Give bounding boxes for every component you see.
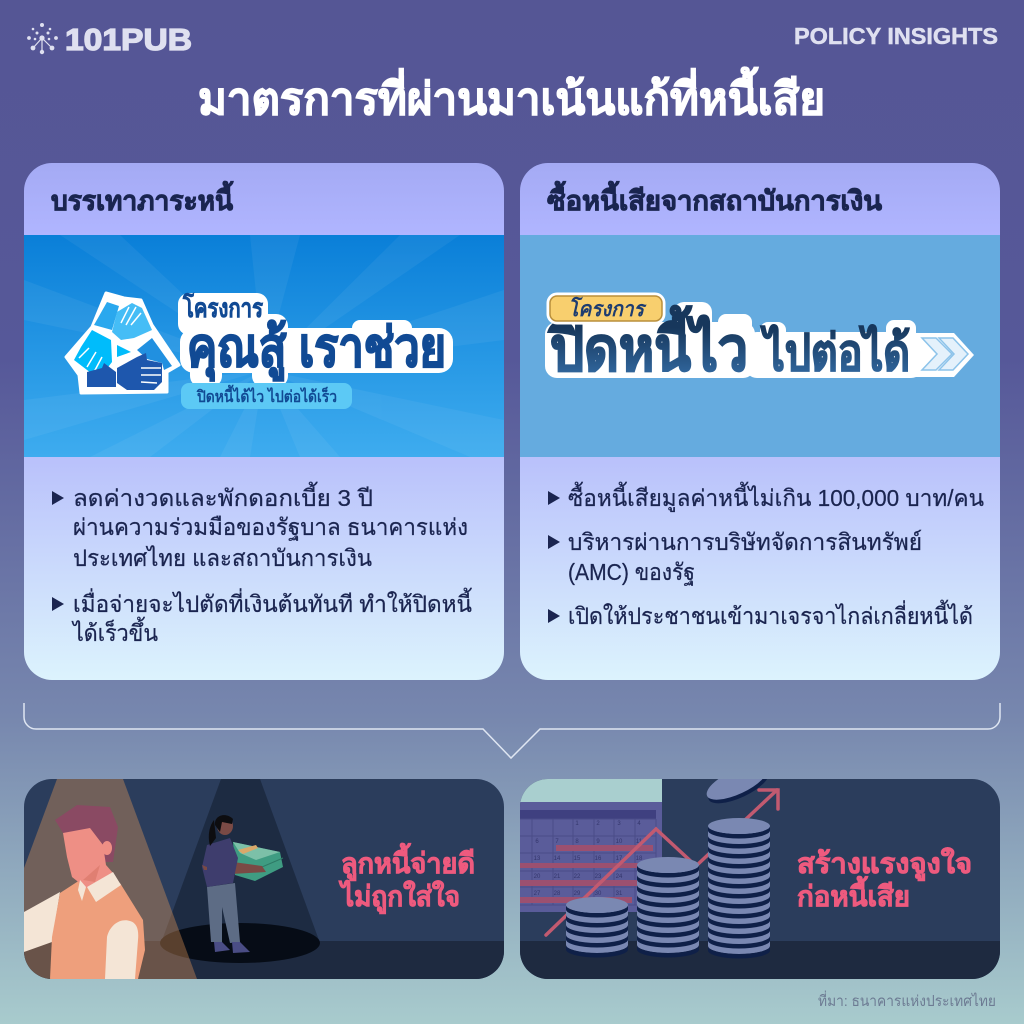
panel: buying bad debt bbox=[520, 163, 1000, 680]
icon: chevrons bbox=[922, 338, 968, 370]
logo halo bbox=[545, 302, 974, 378]
bracket connector bbox=[24, 703, 1000, 758]
icon: calendar: 30 bbox=[595, 891, 602, 897]
bullet list: ประเทศไทย และสถาบันการเงิน bbox=[73, 545, 372, 571]
icon: three hands bbox=[66, 293, 179, 393]
heading: บรรเทาภาระหนี้ bbox=[51, 180, 234, 216]
logo halo bbox=[178, 293, 453, 387]
icon: calendar: 28 bbox=[554, 891, 561, 897]
arrow: rising line bbox=[546, 790, 778, 935]
banner: pid nee wai: ไปต่อได้ bbox=[760, 324, 910, 381]
icon: calendar: 2 bbox=[596, 821, 600, 827]
panel header bbox=[520, 163, 1000, 235]
bullet list: ลดค่างวดและพักดอกเบี้ย 3 ปี bbox=[73, 482, 373, 511]
bullet list: ได้เร็วขึ้น bbox=[71, 617, 158, 646]
caption bbox=[338, 842, 475, 914]
bullet list: (AMC) ของรัฐ bbox=[568, 559, 695, 586]
icon: calendar: 3 bbox=[617, 821, 621, 827]
logo text: name: คุณสู้ เราช่วย bbox=[187, 318, 446, 382]
icon: calendar: 24 bbox=[616, 874, 623, 880]
banner: khun su rao chuai bbox=[24, 235, 504, 457]
bullet list: ซื้อหนี้เสียมูลค่าหนี้ไม่เกิน 100,000 บาท/คน bbox=[568, 482, 984, 512]
logo: 101PUB bbox=[27, 22, 192, 57]
bullet list: เปิดให้ประชาชนเข้ามาเจรจาไกล่เกลี่ยหนี้ได้ bbox=[568, 600, 973, 629]
section label: policy insights: POLICY INSIGHTS bbox=[794, 23, 998, 49]
icon: calendar: 8 bbox=[575, 839, 579, 845]
caption: ลูกหนี้จ่ายดี bbox=[341, 842, 475, 881]
icon: calendar: 18 bbox=[636, 856, 643, 862]
bullet list: ผ่านความร่วมมือของรัฐบาล ธนาคารแห่ง bbox=[73, 514, 468, 541]
icon: calendar: 20 bbox=[534, 874, 541, 880]
icon: calendar: 17 bbox=[616, 856, 623, 862]
panel header bbox=[24, 163, 504, 235]
icon: calendar: 27 bbox=[534, 891, 541, 897]
banner: pid nee wai bbox=[520, 235, 1000, 457]
badge: project bbox=[550, 296, 662, 321]
panel body bbox=[520, 457, 1000, 680]
caption: ไม่ถูกใส่ใจ bbox=[338, 880, 460, 914]
dark spotlight bbox=[161, 779, 320, 943]
logo text: project: โครงการ bbox=[182, 292, 263, 323]
bullet list: เมื่อจ่ายจะไปตัดที่เงินต้นทันที ทำให้ปิดหนี้ bbox=[73, 588, 472, 617]
icon: calendar: 22 bbox=[574, 874, 581, 880]
icon: calendar: 11 bbox=[636, 839, 643, 845]
icon: calendar: 15 bbox=[574, 856, 581, 862]
icon: man in vest bbox=[24, 805, 145, 979]
coin stack tall bbox=[708, 818, 770, 958]
bullet list bbox=[52, 482, 472, 646]
panel body bbox=[24, 457, 504, 680]
panel: moral hazard bbox=[520, 757, 1000, 979]
coin stack small bbox=[566, 897, 628, 958]
bullet list: บริหารผ่านการบริษัทจัดการสินทรัพย์ bbox=[568, 529, 922, 555]
icon: calendar: 1 bbox=[575, 821, 579, 827]
icon: calendar: 16 bbox=[595, 856, 602, 862]
icon: calendar: 6 bbox=[535, 839, 539, 845]
wordmark: 101PUB bbox=[65, 22, 192, 57]
floor bbox=[520, 941, 1000, 979]
logo name: ปิดหนี้ไว bbox=[548, 305, 748, 383]
title: มาตรการที่ผ่านมาเน้นแก้ที่หนี้เสีย bbox=[198, 66, 825, 124]
icon: calendar: 14 bbox=[554, 856, 561, 862]
floating coin bbox=[706, 779, 767, 804]
bullet list bbox=[548, 482, 984, 629]
source note: ที่มา: ธนาคารแห่งประเทศไทย bbox=[818, 990, 996, 1010]
coin stack medium bbox=[637, 857, 699, 958]
icon: calendar: 7 bbox=[555, 839, 559, 845]
icon: calendar: 31 bbox=[616, 891, 623, 897]
floor bbox=[24, 941, 504, 979]
badge: project: โครงการ bbox=[568, 296, 647, 321]
heading: ซื้อหนี้เสียจากสถาบันการเงิน bbox=[547, 180, 883, 216]
icon: calendar: 13 bbox=[534, 856, 541, 862]
icon: calendar: 4 bbox=[637, 821, 641, 827]
icon: calendar: 23 bbox=[595, 874, 602, 880]
caption bbox=[797, 847, 972, 912]
icon: calendar: 21 bbox=[554, 874, 561, 880]
caption: สร้างแรงจูงใจ bbox=[797, 847, 972, 881]
icon: network burst bbox=[27, 23, 58, 54]
icon: calendar bbox=[520, 779, 662, 912]
logo tagline bbox=[181, 383, 352, 409]
light spotlight bbox=[24, 779, 197, 979]
caption: ก่อหนี้เสีย bbox=[797, 875, 910, 912]
logo tagline: ปิดหนี้ได้ไว ไปต่อได้เร็ว bbox=[196, 384, 337, 406]
panel: good debtors overlooked bbox=[24, 779, 504, 979]
icon: calendar: 29 bbox=[574, 891, 581, 897]
panel: debt relief bbox=[24, 163, 504, 680]
icon: woman with money bbox=[202, 815, 283, 953]
icon: calendar: 10 bbox=[616, 839, 623, 845]
icon: calendar: 9 bbox=[596, 839, 600, 845]
